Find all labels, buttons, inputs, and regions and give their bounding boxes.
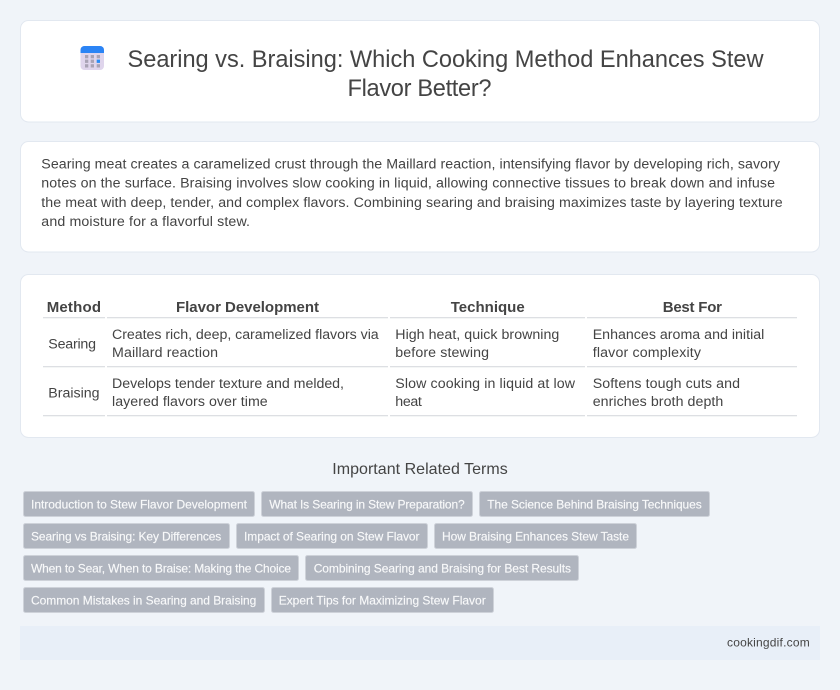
tag: Common Mistakes in Searing and Braising xyxy=(31,593,256,607)
table row: searing: Searing xyxy=(48,336,96,352)
heading: related terms: Important Related Terms xyxy=(332,461,508,478)
tag: How Braising Enhances Stew Taste xyxy=(442,529,629,543)
table row: braising: Slow cooking in liquid at low xyxy=(395,376,576,392)
footer bar xyxy=(20,626,820,660)
tag xyxy=(24,556,298,580)
tag: When to Sear, When to Braise: Making the Choice xyxy=(31,561,291,575)
table row: braising xyxy=(43,376,797,416)
table row: searing xyxy=(43,327,797,367)
footer bar: cookingdif.com xyxy=(727,636,810,650)
tag xyxy=(24,588,264,612)
table row: braising: heat xyxy=(395,394,422,410)
icon: calendar xyxy=(80,46,104,70)
panel: intro text xyxy=(20,142,820,252)
table row: searing: before stewing xyxy=(395,345,489,361)
intro paragraph: Searing meat creates a caramelized crust through the Maillard reaction, intensifying flavor by developing rich, savory xyxy=(41,156,781,172)
tag xyxy=(236,524,428,548)
panel: title header xyxy=(20,20,820,122)
tag xyxy=(272,588,494,612)
table row: braising: enriches broth depth xyxy=(593,394,723,410)
table row: searing: Creates rich, deep, caramelized flavors via xyxy=(112,327,379,343)
tag xyxy=(434,524,636,548)
table row: searing: flavor complexity xyxy=(593,345,702,361)
tag xyxy=(24,492,254,516)
tag: Searing vs Braising: Key Differences xyxy=(31,529,221,543)
intro paragraph xyxy=(41,156,783,230)
tag: Impact of Searing on Stew Flavor xyxy=(244,529,420,543)
tag: Expert Tips for Maximizing Stew Flavor xyxy=(279,593,486,607)
table header row: Method xyxy=(47,299,101,316)
table header row: Technique xyxy=(451,299,525,316)
table header row xyxy=(43,299,797,318)
title: Flavor Better? xyxy=(348,76,492,102)
intro paragraph: notes on the surface. Braising involves slow cooking in liquid, allowing connective tissues to break down and infuse xyxy=(41,175,775,191)
table row: searing: High heat, quick browning xyxy=(395,327,559,343)
tag xyxy=(480,492,710,516)
table row: braising: Braising xyxy=(48,385,100,401)
intro paragraph: and moisture for a flavorful stew. xyxy=(41,214,250,230)
title xyxy=(128,47,764,102)
intro paragraph: the meat with deep, tender, and complex flavors. Combining searing and braising maximizes taste by layering texture xyxy=(41,195,783,211)
table row: braising: Develops tender texture and melded, xyxy=(112,376,344,392)
table row: searing: Enhances aroma and initial xyxy=(593,327,764,343)
tag: The Science Behind Braising Techniques xyxy=(487,497,702,511)
table header row: Best For xyxy=(663,299,722,316)
related term tags xyxy=(24,492,710,612)
table header row: Flavor Development xyxy=(176,299,319,316)
title: Searing vs. Braising: Which Cooking Method Enhances Stew xyxy=(128,47,764,73)
table row: braising: Softens tough cuts and xyxy=(593,376,740,392)
table row: braising: layered flavors over time xyxy=(112,394,268,410)
tag: What Is Searing in Stew Preparation? xyxy=(269,497,465,511)
tag xyxy=(24,524,230,548)
tag xyxy=(262,492,472,516)
tag: Introduction to Stew Flavor Development xyxy=(31,497,248,511)
panel: comparison table xyxy=(20,274,820,438)
tag: Combining Searing and Braising for Best Results xyxy=(314,561,571,575)
tag xyxy=(306,556,578,580)
table row: searing: Maillard reaction xyxy=(112,345,218,361)
